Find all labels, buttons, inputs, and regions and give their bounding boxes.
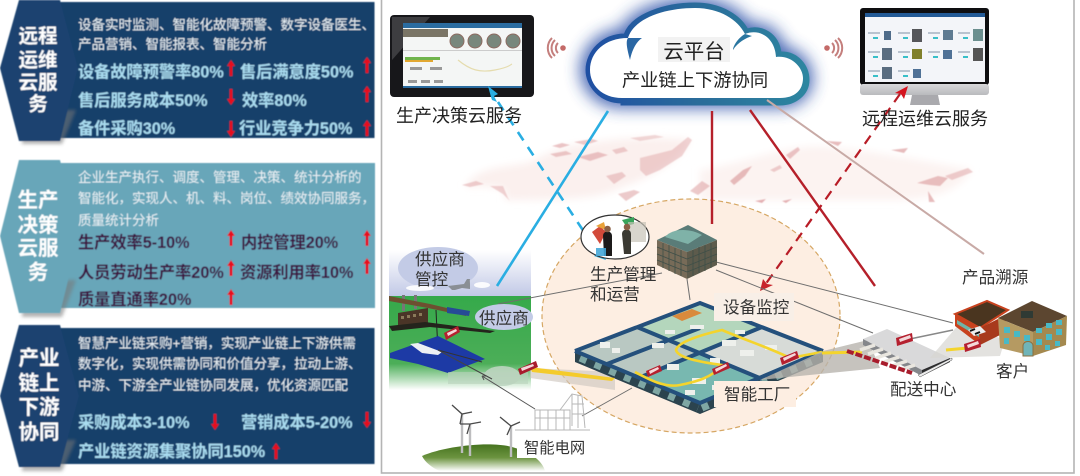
tablet: production dashboard (390, 15, 534, 97)
cloud platform (587, 4, 808, 104)
label: 智能电网: 智能电网 (524, 439, 585, 457)
metrics with arrows: 售后满意度50% (240, 62, 353, 82)
office building (657, 225, 717, 279)
hexagon title: 远程运维云服务: 云服 (18, 72, 58, 94)
ship (410, 343, 442, 355)
metrics with arrows: 资源利用率10% (240, 263, 353, 282)
label: 智能工厂: 智能工厂 (724, 385, 790, 404)
hexagon title: 生产决策云服务: 决策 (18, 214, 59, 237)
label: 设备监控 (714, 293, 794, 321)
label: 远程运维云服务: 远程运维云服务 (862, 109, 988, 129)
label: 客户: 客户 (996, 362, 1029, 381)
metrics with arrows: 效率80% (242, 91, 307, 110)
metrics with arrows: 采购成本3-10% (78, 413, 190, 432)
connector: red vertical line (711, 111, 713, 224)
red shop (955, 301, 1008, 345)
airplane (448, 279, 470, 290)
hexagon title: 远程运维云服务: 运维 (18, 50, 58, 72)
cloud subtitle: 产业链上下游协同 (622, 70, 768, 90)
hexagon title: 远程运维云服务 (0, 0, 78, 141)
frame: right illustration panel (382, 0, 1074, 473)
metrics with arrows: 备件采购30% (78, 119, 175, 138)
label: 供应商管控: 供应商 (415, 250, 465, 269)
panel: 产业链上下游协同 (0, 325, 374, 471)
description text (78, 336, 362, 393)
label: 供应商 (475, 304, 533, 330)
description text: 智能化，实现人、机、料、岗位、绩效协同服务， (78, 191, 375, 206)
hexagon title: 生产决策云服务 (0, 160, 79, 313)
description text: 产品营销、智能报表、智能分析 (78, 37, 267, 52)
metrics with arrows (78, 230, 371, 309)
lake (390, 336, 485, 373)
metrics with arrows: 内控管理20% (241, 233, 338, 252)
distribution center (760, 329, 952, 380)
hexagon title: 远程运维云服务: 务 (28, 94, 48, 116)
connector: blue solid line (497, 111, 608, 286)
label: 供应商: 供应商 (479, 309, 529, 328)
world map (462, 135, 973, 203)
hexagon title: 产业链上下游协同: 协同 (18, 421, 60, 444)
supplier scene (389, 247, 531, 390)
hexagon title: 产业链上下游协同: 产业 (18, 347, 60, 370)
metrics with arrows: 产业链资源集聚协同150% (78, 442, 265, 461)
description text: 质量统计分析 (78, 213, 159, 228)
RFID tags (444, 326, 981, 377)
metrics with arrows: 行业竞争力50% (239, 119, 352, 138)
label: 供应商管控: 管控 (415, 270, 448, 289)
hexagon title: 产业链上下游协同 (0, 325, 79, 467)
description text: 数字化，实现供需协同和价值分享，拉动上游、 (78, 356, 362, 372)
grey shadow: flow to distribution center (530, 368, 615, 390)
monitor: remote maintenance dashboard (860, 8, 989, 105)
hexagon title: 产业链上下游协同: 下游 (18, 395, 60, 419)
icon: wifi signal right (824, 38, 842, 58)
metrics with arrows (78, 57, 371, 138)
description text: 企业生产执行、调度、管理、决策、统计分析的 (78, 169, 362, 185)
metrics with arrows: 生产效率5-10% (78, 233, 190, 252)
hexagon title: 生产决策云服务: 务 (28, 261, 48, 284)
label: 配送中心: 配送中心 (890, 380, 957, 399)
label: 生产管理和运营: 和运营 (590, 285, 640, 304)
connector: tan line (767, 100, 984, 254)
panel: 远程运维云服务 (0, 0, 375, 144)
metrics with arrows: 设备故障预警率80% (78, 62, 224, 82)
product buildings (905, 301, 1067, 358)
description text (78, 169, 375, 228)
cloud title: 云平台 (663, 40, 725, 64)
connector: red diagonal line (750, 110, 875, 286)
connectors: grey network lines (438, 262, 953, 416)
customer building (998, 301, 1067, 356)
description text: 中游、下游全产业链协同发展，优化资源匹配 (78, 377, 348, 393)
label: 设备监控: 设备监控 (723, 298, 789, 317)
metrics with arrows: 营销成本5-20% (241, 413, 353, 432)
description text: 设备实时监测、智能化故障预警、数字设备医生、 (78, 16, 375, 32)
supplier factory (389, 295, 495, 352)
label: 生产决策云服务: 生产决策云服务 (396, 106, 522, 126)
metrics with arrows (78, 412, 371, 461)
label: 智能电网 (517, 436, 593, 458)
hexagon title: 产业链上下游协同: 链上 (18, 372, 60, 395)
wind farm (422, 405, 545, 471)
icon: wifi signal left (548, 38, 566, 58)
factory zone circle (542, 199, 840, 433)
label: 供应商管控 (415, 250, 465, 289)
description text: 智慧产业链采购+营销，实现产业链上下游供需 (78, 336, 356, 351)
smart grid substation (515, 394, 590, 430)
connector: red dashed arrow (760, 86, 908, 291)
panel: 生产决策云服务 (0, 160, 375, 317)
smart factory floor (530, 303, 823, 414)
label: 生产管理和运营 (590, 265, 657, 304)
labels (396, 106, 1029, 458)
connector: blue dashed arrow (488, 86, 606, 260)
meeting icon: production management (581, 215, 649, 259)
metrics with arrows: 质量直通率20% (78, 290, 191, 309)
hexagon title: 远程运维云服务: 远程 (18, 26, 58, 48)
description text (78, 16, 375, 52)
metrics with arrows: 人员劳动生产率20% (78, 263, 224, 282)
label: 生产管理和运营: 生产管理 (590, 265, 657, 284)
label: 智能工厂 (714, 381, 796, 407)
label: 产品溯源: 产品溯源 (962, 268, 1029, 287)
hexagon title: 生产决策云服务: 云服 (18, 237, 59, 260)
hexagon title: 生产决策云服务: 生产 (18, 189, 58, 212)
metrics with arrows: 售后服务成本50% (78, 91, 208, 110)
